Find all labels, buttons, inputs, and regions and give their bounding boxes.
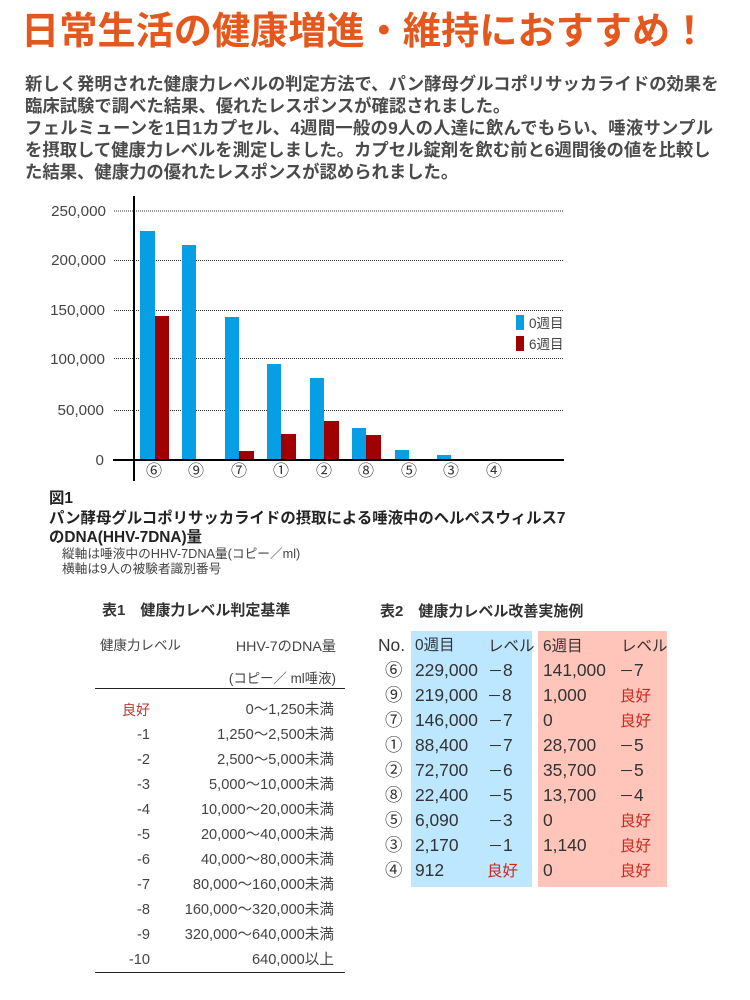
table 2: improvement examples: レベル (488, 638, 535, 655)
x axis subject labels: ④ (486, 462, 502, 480)
legend: 6週目 (529, 337, 564, 352)
table 1: health level criteria: 2,500～5,000未満 (217, 752, 334, 768)
table 1: health level criteria: 80,000～160,000未満 (193, 877, 334, 893)
table 1: health level criteria: 320,000～640,000未満 (185, 927, 334, 943)
table 2: improvement examples: 22,400 (415, 785, 468, 805)
table 1: health level criteria: -4 (137, 802, 150, 818)
table 1: health level criteria: 良好 (122, 702, 150, 718)
title: 日常生活の健康増進・維持におすすめ！ (21, 10, 708, 53)
table 2: improvement examples: ⑤ (385, 810, 402, 830)
table 2: improvement examples: ⑦ (385, 710, 402, 730)
bars: week 6 (155, 316, 381, 460)
table 1 heading: 表1 健康力レベル判定基準 (102, 602, 290, 619)
table 2: improvement examples: 良好 (620, 688, 651, 705)
y axis labels: 0 (96, 452, 104, 469)
x axis subject labels (146, 462, 502, 480)
table 1: health level criteria: -10 (129, 952, 150, 968)
y axis labels (50, 203, 106, 469)
y axis labels: 200,000 (51, 252, 106, 269)
table 2: improvement examples: レベル (621, 638, 668, 655)
table 2: improvement examples: 0週目 (415, 637, 455, 654)
table 2: improvement examples: 良好 (487, 863, 518, 880)
table 2: improvement examples: －5 (619, 760, 644, 780)
table 2: improvement examples: ⑨ (385, 685, 402, 705)
intro text block: 新しく発明された健康力レベルの判定方法で、パン酵母グルコポリサッカライドの効果を (25, 74, 719, 94)
table 2: improvement examples: 6週目 (543, 638, 583, 655)
table 2: improvement examples: 良好 (620, 813, 651, 830)
table 2: improvement examples: ① (385, 735, 402, 755)
legend: 0週目 (529, 316, 564, 331)
legend (516, 315, 564, 352)
y axis labels: 100,000 (50, 351, 105, 368)
table 2: improvement examples: 0 (543, 860, 553, 880)
table 2: improvement examples: ⑥ (385, 660, 402, 680)
table 1: health level criteria: 1,250～2,500未満 (217, 727, 334, 743)
axis notes: 横軸は9人の被験者識別番号 (62, 562, 221, 576)
table 2: improvement examples: －7 (488, 710, 513, 730)
table 2: improvement examples: ② (385, 760, 402, 780)
table 1: health level criteria: 0～1,250未満 (246, 702, 334, 718)
x axis subject labels: ⑥ (146, 462, 162, 480)
table 2: improvement examples: 13,700 (543, 785, 596, 805)
table 2: improvement examples: No. (378, 635, 405, 655)
table 1: health level criteria: 160,000～320,000未満 (185, 902, 334, 918)
table 1: health level criteria: HHV-7のDNA量 (236, 639, 336, 655)
table 2: improvement examples: －7 (488, 735, 513, 755)
table 2: improvement examples: －6 (488, 760, 513, 780)
table 2: improvement examples: －5 (488, 785, 513, 805)
table 2: improvement examples: －1 (488, 835, 513, 855)
intro text block: を摂取して健康力レベルを測定しました。カプセル錠剤を飲む前と6週間後の値を比較し (25, 140, 711, 160)
table 2: improvement examples: 6,090 (415, 810, 459, 830)
table 1: health level criteria: 40,000～80,000未満 (201, 852, 334, 868)
table 1: health level criteria: 20,000～40,000未満 (201, 827, 334, 843)
axis notes (62, 547, 300, 576)
figure caption (49, 490, 565, 546)
figure caption: のDNA(HHV-7DNA)量 (49, 529, 202, 546)
table 2: improvement examples: 141,000 (543, 660, 606, 680)
table 2: improvement examples: 88,400 (415, 735, 468, 755)
table 2: improvement examples: －4 (619, 785, 644, 805)
table 2: improvement examples: －7 (619, 660, 644, 680)
table 2: improvement examples: ⑧ (385, 785, 402, 805)
x axis subject labels: ⑤ (401, 462, 417, 480)
bar chart (50, 196, 564, 481)
table 2: improvement examples: 229,000 (415, 660, 478, 680)
axis notes: 縦軸は唾液中のHHV-7DNA量(コピー／ml) (62, 547, 300, 561)
table 2: improvement examples: ③ (385, 835, 402, 855)
table 2: improvement examples: 良好 (620, 713, 651, 730)
table 2: improvement examples: 1,140 (543, 835, 587, 855)
table 2: improvement examples: 219,000 (415, 685, 478, 705)
table 2: improvement examples: 良好 (620, 838, 651, 855)
y axis labels: 50,000 (58, 402, 104, 419)
table 2: improvement examples: 35,700 (543, 760, 596, 780)
table 1: health level criteria: 10,000～20,000未満 (201, 802, 334, 818)
table 1: health level criteria: -1 (137, 727, 150, 743)
table 2: improvement examples: －5 (619, 735, 644, 755)
intro text block: た結果、健康力の優れたレスポンスが認められました。 (25, 162, 458, 182)
intro text block: 臨床試験で調べた結果、優れたレスポンスが確認されました。 (25, 96, 510, 116)
x axis subject labels: ⑦ (231, 462, 247, 480)
x axis subject labels: ⑨ (188, 462, 204, 480)
x axis subject labels: ⑧ (358, 462, 374, 480)
table 2: improvement examples (378, 631, 668, 887)
table 1: health level criteria: -3 (137, 777, 150, 793)
table 2: improvement examples: －8 (487, 685, 512, 705)
table 1: health level criteria: -8 (137, 902, 150, 918)
table 1: health level criteria: 健康力レベル (100, 638, 181, 653)
table 2: improvement examples: 28,700 (543, 735, 596, 755)
table 2: improvement examples: 良好 (620, 863, 651, 880)
table 1: health level criteria: (コピー／ ml唾液) (229, 671, 336, 686)
table 1: health level criteria: -5 (137, 827, 150, 843)
bars: week 0 (140, 231, 451, 460)
x axis subject labels: ② (316, 462, 332, 480)
x axis subject labels: ③ (443, 462, 459, 480)
intro text block (25, 74, 719, 182)
table 1: health level criteria (95, 638, 345, 973)
table 2: improvement examples: 1,000 (543, 685, 587, 705)
table 2: improvement examples: 912 (415, 860, 444, 880)
figure caption: パン酵母グルコポリサッカライドの摂取による唾液中のヘルペスウィルス7 (49, 510, 565, 526)
table 2: improvement examples: －3 (488, 810, 513, 830)
table 2 heading: 表2 健康力レベル改善実施例 (380, 603, 583, 620)
table 2: improvement examples: ④ (385, 860, 402, 880)
table 2: improvement examples: 0 (543, 710, 553, 730)
table 2: improvement examples: 0 (543, 810, 553, 830)
table 1: health level criteria: -7 (137, 877, 150, 893)
table 2: improvement examples: －8 (488, 660, 513, 680)
y axis labels: 150,000 (50, 302, 105, 319)
y axis labels: 250,000 (51, 203, 106, 220)
table 1: health level criteria: 640,000以上 (252, 952, 334, 968)
table 1: health level criteria: -2 (137, 752, 150, 768)
table 1: health level criteria: -9 (137, 927, 150, 943)
table 2: improvement examples: 2,170 (415, 835, 459, 855)
intro text block: フェルミューンを1日1カプセル、4週間一般の9人の人達に飲んでもらい、唾液サンプル (25, 118, 713, 138)
table 2: improvement examples: 146,000 (415, 710, 478, 730)
x axis subject labels: ① (273, 462, 289, 480)
table 1: health level criteria: -6 (137, 852, 150, 868)
figure caption: 図1 (49, 490, 73, 507)
table 1: health level criteria: 5,000～10,000未満 (209, 777, 334, 793)
axes (113, 196, 564, 481)
table 2: improvement examples: 72,700 (415, 760, 468, 780)
